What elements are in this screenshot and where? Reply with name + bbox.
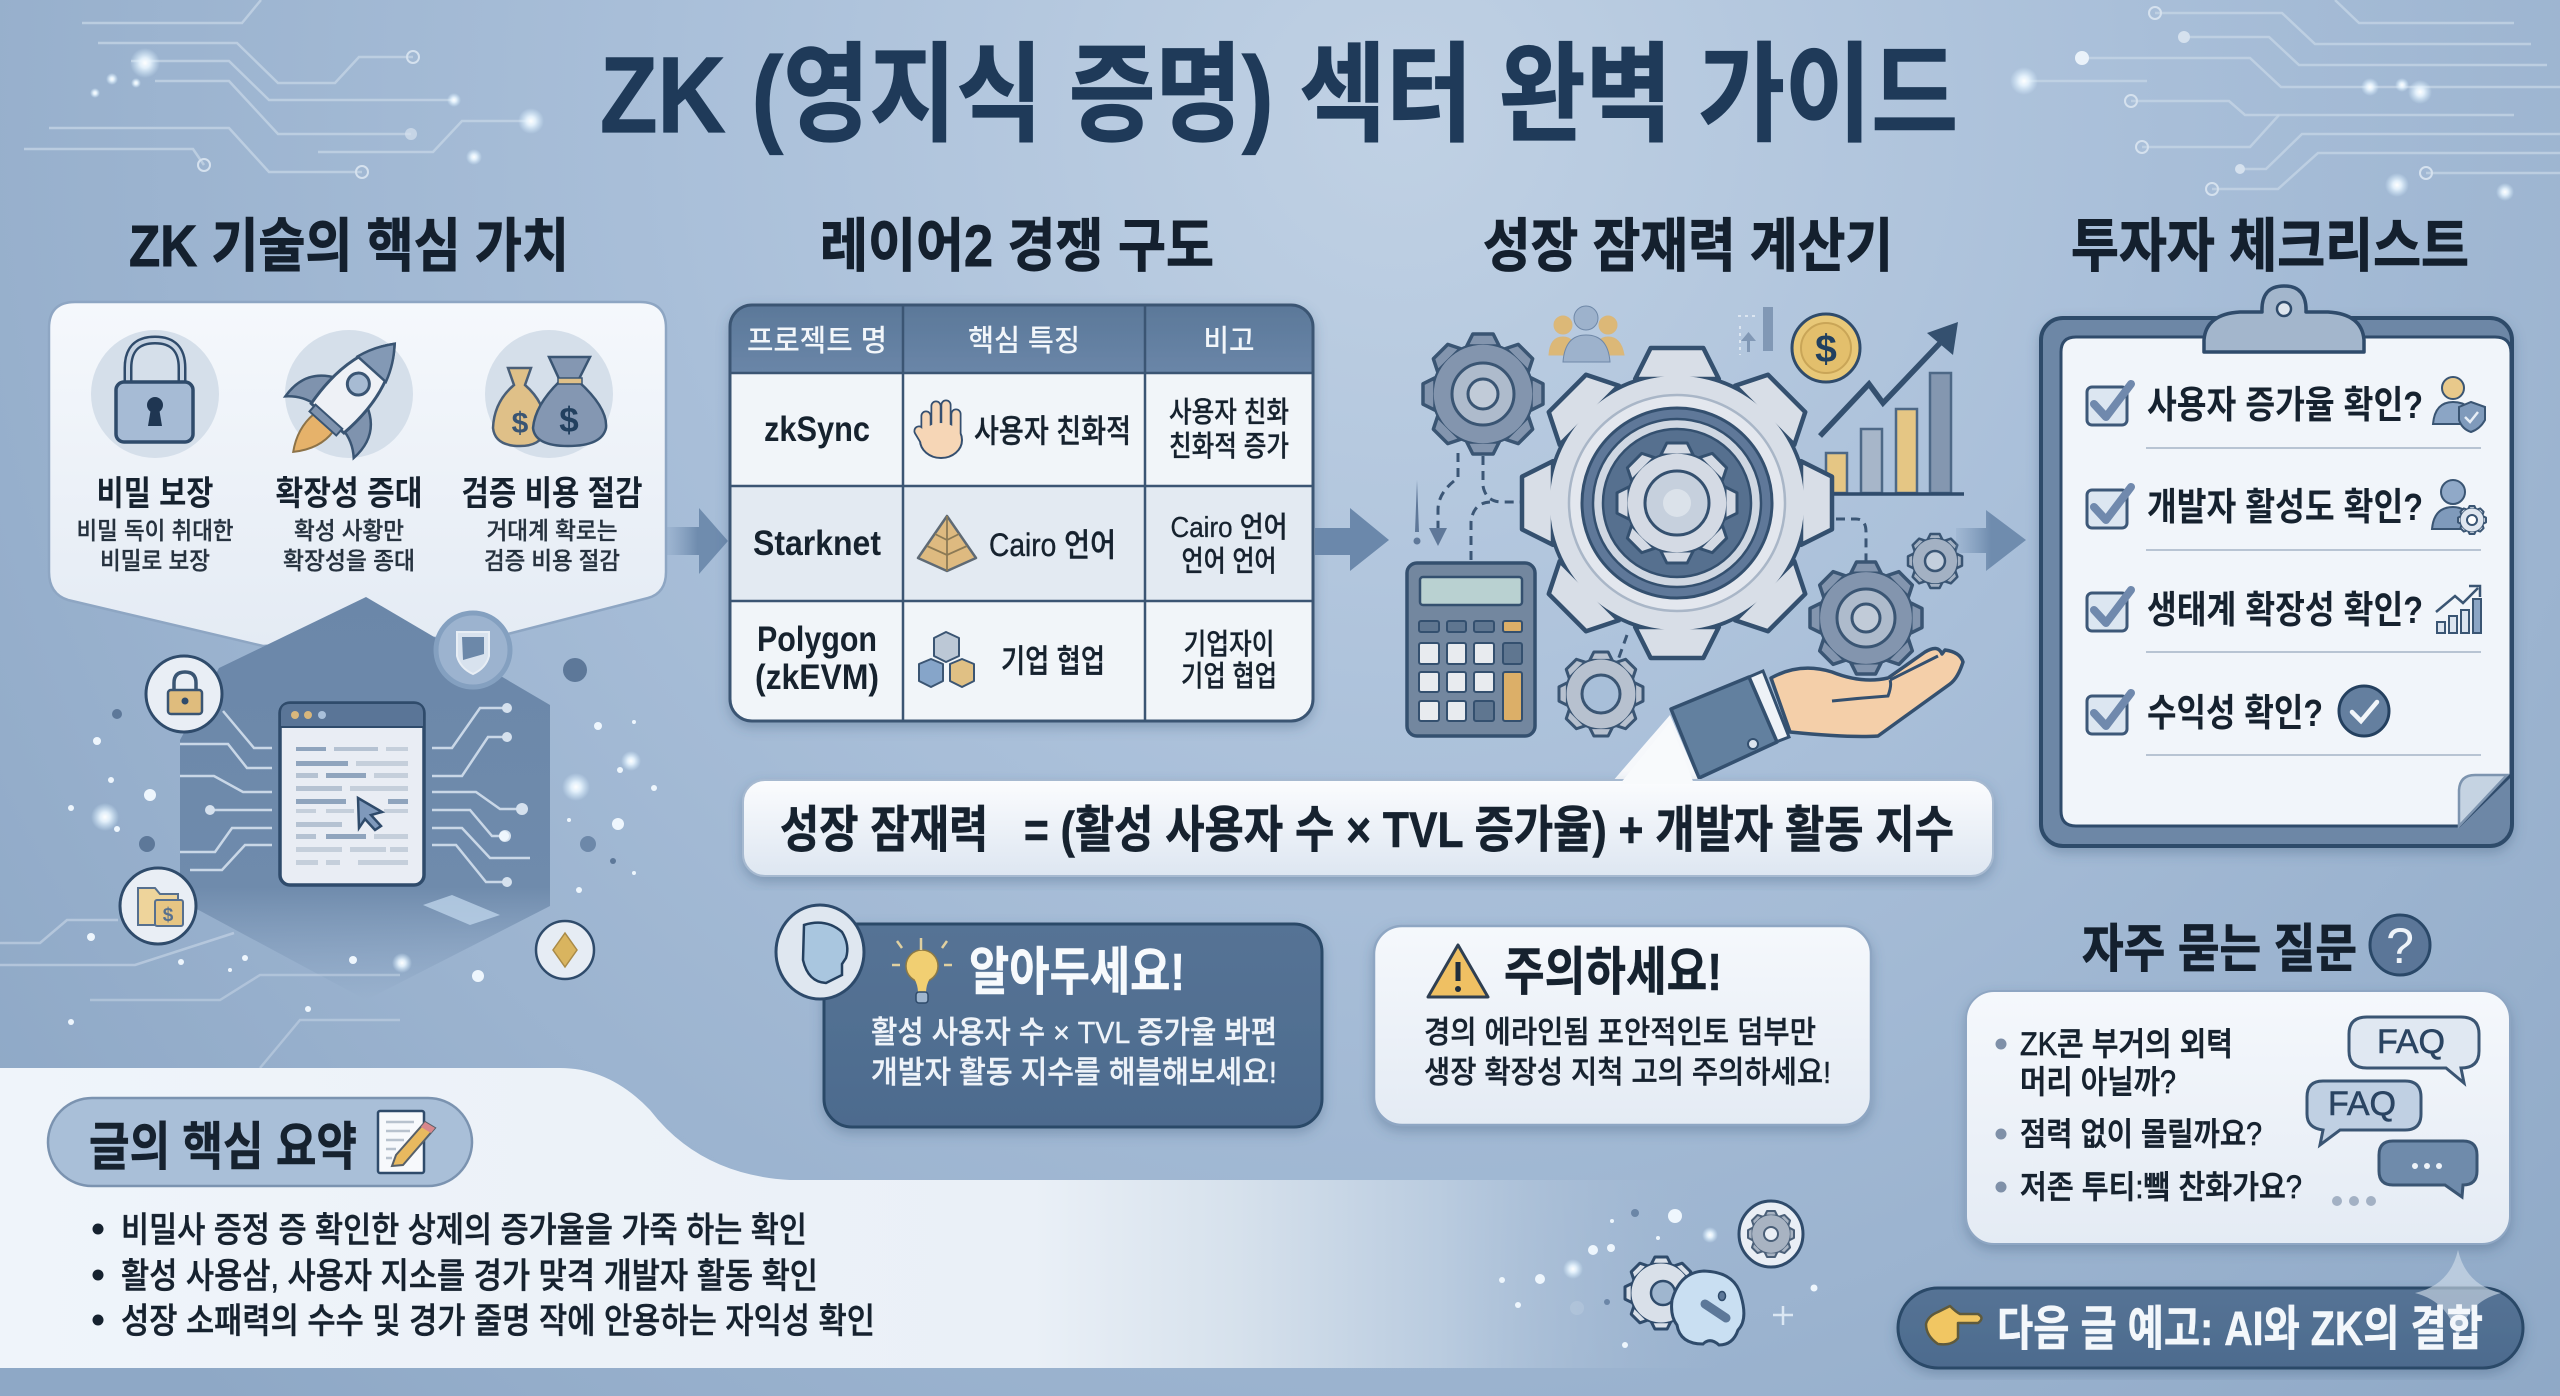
row: Starknet: 언어 언어 [1182, 545, 1276, 578]
row: zkSync: 친화적 증가 [1169, 430, 1289, 463]
bubble: FAQ 2 [2307, 1081, 2421, 1145]
summary bullets: 비밀사 증정 증 확인한 상제의 증가율을 가죽 하는 확인 [121, 1211, 807, 1250]
bubble: FAQ 1: FAQ [2377, 1023, 2445, 1061]
label: scalability: 확장성 증대 [276, 475, 422, 513]
badge: shield [436, 613, 510, 687]
callout: good to know: 개발자 활동 지수를 해블해보세요! [871, 1055, 1277, 1090]
panel: core value callout [49, 302, 666, 646]
icon: tiny gear [1908, 534, 1962, 588]
icon: right gear [1810, 562, 1922, 674]
table header: 비고 [1204, 325, 1254, 358]
FAQ list: 점력 없이 몰릴까요? [2020, 1116, 2262, 1152]
row: Polygon: 기업 협업 [1181, 660, 1277, 693]
heading: growth calculator: 성장 잠재력 계산기 [1483, 214, 1893, 279]
illustration: hexagon with browser window [0, 597, 657, 1068]
summary panel [0, 1068, 1720, 1368]
FAQ list: ZK콘 부거의 외텩 [2020, 1026, 2233, 1062]
table header [730, 305, 1313, 373]
icon: central gear [1522, 348, 1832, 658]
badge: folder [120, 868, 196, 944]
icon: hand [919, 405, 962, 458]
heading: L2 competition: 레이어2 경쟁 구도 [820, 214, 1214, 279]
callout: caution: 경의 에라인됨 포안적인토 덤부만 [1424, 1015, 1816, 1050]
summary bullets [92, 1211, 875, 1341]
icon: gear badge [1739, 1201, 1803, 1267]
icon: lower small gear [1559, 652, 1643, 736]
icon: notepad and pencil [378, 1111, 435, 1173]
label: verification cost: 검증 비용 절감 [484, 548, 620, 575]
heading: investor checklist: 투자자 체크리스트 [2071, 214, 2469, 279]
icon: light bulb [892, 938, 952, 1003]
row: Polygon: 기업자이 [1184, 628, 1274, 661]
avatar [776, 905, 864, 999]
icon: small gear [1625, 1257, 1697, 1329]
formula box [743, 715, 1993, 876]
callout: caution: 주의하세요! [1504, 944, 1722, 1002]
bubble: FAQ 2: FAQ [2328, 1085, 2396, 1123]
icon: lock [91, 330, 219, 458]
sparkle [2415, 1250, 2501, 1340]
label: verification cost: 거대계 확로는 [486, 518, 618, 545]
arrow: panel 1 to table [667, 508, 728, 574]
row: Starknet: Cairo 언어 [989, 527, 1116, 563]
icon: coin [1792, 314, 1860, 382]
label: secrecy: 비밀 보장 [96, 475, 214, 513]
FAQ list: 머리 아닐까? [2020, 1064, 2176, 1100]
item: user growth: 사용자 증가율 확인? [2147, 385, 2423, 427]
icon: coin: $ [1815, 328, 1837, 371]
row: Starknet: Starknet [753, 524, 881, 563]
next article bar [1898, 1250, 2523, 1368]
table header: 프로젝트 명 [747, 325, 887, 358]
row: Starknet [753, 511, 1288, 578]
illustration: growth calculator [1407, 306, 1964, 778]
item: user growth [2087, 377, 2485, 432]
particles [1499, 1209, 1818, 1348]
row: Polygon: Polygon [757, 620, 877, 659]
background circuit lines left [24, 0, 544, 178]
icon: small bar and arrow [1738, 307, 1773, 355]
panel: FAQ [1966, 991, 2510, 1244]
label: secrecy: 비밀 독이 취대한 [76, 518, 234, 545]
heading: FAQ: 자주 묻는 질문 [2082, 921, 2357, 979]
particles [68, 658, 657, 1025]
formula box: 성장 잠재력 = (활성 사용자 수 × TVL 증가율) + 개발자 활동 지수 [780, 802, 1954, 858]
label: verification cost [462, 475, 642, 575]
dashed connectors [1414, 453, 1866, 660]
row: Polygon: (zkEVM) [755, 658, 879, 697]
mascot with gears [1499, 1201, 1818, 1348]
background circuit lines right [2010, 0, 2560, 201]
chart: growth bars [1820, 322, 1964, 494]
row: zkSync [764, 396, 1289, 463]
item: profitability: 수익성 확인? [2147, 693, 2323, 735]
callout: good to know: 알아두세요! [969, 944, 1185, 1002]
bubble: dots [2379, 1141, 2477, 1197]
title: ZK (영지식 증명) 섹터 완벽 가이드 [600, 34, 1958, 155]
badge: diamond [536, 921, 594, 979]
row: Starknet: Cairo 언어 [1170, 511, 1288, 544]
badge: folder: $ [163, 905, 174, 926]
icon: blocks [919, 632, 974, 687]
icon: people [1549, 306, 1624, 362]
callout: good to know: 활성 사용자 수 × TVL 증가율 봐편 [871, 1015, 1277, 1050]
FAQ list [1996, 1026, 2302, 1205]
paper [2061, 337, 2511, 826]
icon: upper left gear [1423, 334, 1543, 454]
icon: pointing hand [1926, 1306, 1982, 1344]
summary heading pill [48, 1098, 472, 1186]
icon: money bags: $ [512, 407, 529, 440]
heading: ZK core value: ZK 기술의 핵심 가치 [129, 214, 569, 279]
clip [2204, 286, 2364, 352]
label: scalability [276, 475, 422, 575]
icon: blob mascot [1672, 1271, 1744, 1345]
item: developer activity [2087, 480, 2486, 534]
row: Polygon: 기업 협업 [1001, 643, 1105, 679]
heading: FAQ: ? [2386, 918, 2414, 974]
clipboard: investor checklist [2041, 286, 2512, 846]
badge: lock [146, 656, 222, 732]
icon: hand holding gear [1671, 648, 1963, 778]
icon: calculator [1407, 563, 1535, 736]
table header: 핵심 특징 [968, 325, 1080, 358]
row: zkSync: 사용자 친화 [1169, 396, 1289, 429]
callout: caution [1374, 926, 1871, 1125]
summary bullets: 성장 소패력의 수수 및 경가 줄명 작에 안용하는 자익성 확인 [121, 1302, 875, 1341]
arrow: table to calculator [1315, 508, 1389, 571]
icon: money bags [485, 330, 613, 458]
item: developer activity: 개발자 활성도 확인? [2147, 487, 2423, 529]
summary heading pill: 글의 핵심 요약 [89, 1119, 357, 1177]
FAQ list: 저존 투티:뺔 찬화가요? [2020, 1169, 2302, 1205]
label: secrecy [76, 475, 234, 575]
label: verification cost: 검증 비용 절감 [462, 475, 642, 513]
label: scalability: 확성 사황만 [294, 518, 404, 545]
browser window [280, 703, 424, 885]
callout: good to know [776, 905, 1322, 1127]
summary bullets: 활성 사용삼, 사용자 지소를 경가 맞격 개발자 활동 확인 [121, 1257, 818, 1296]
callout: caution: 생장 확장성 지척 고의 주의하세요! [1424, 1055, 1831, 1090]
row: zkSync: 사용자 친화적 [974, 413, 1131, 449]
icon: pyramid [918, 516, 976, 571]
row: Polygon [755, 620, 1277, 697]
label: scalability: 확장성을 종대 [283, 548, 415, 575]
label: secrecy: 비밀로 보장 [100, 548, 210, 575]
bubble: FAQ 1 [2349, 1017, 2479, 1083]
item: profitability [2087, 686, 2389, 736]
icon: money bags: $ [559, 401, 579, 440]
row: zkSync: zkSync [764, 410, 870, 449]
icon: rocket [261, 313, 429, 485]
table: L2 competition [730, 305, 1313, 721]
circuit traces [0, 703, 530, 1068]
item: ecosystem scale: 생태계 확장성 확인? [2147, 590, 2423, 632]
icon: warning triangle [1428, 945, 1488, 997]
arrow: calculator to checklist [1956, 510, 2026, 571]
